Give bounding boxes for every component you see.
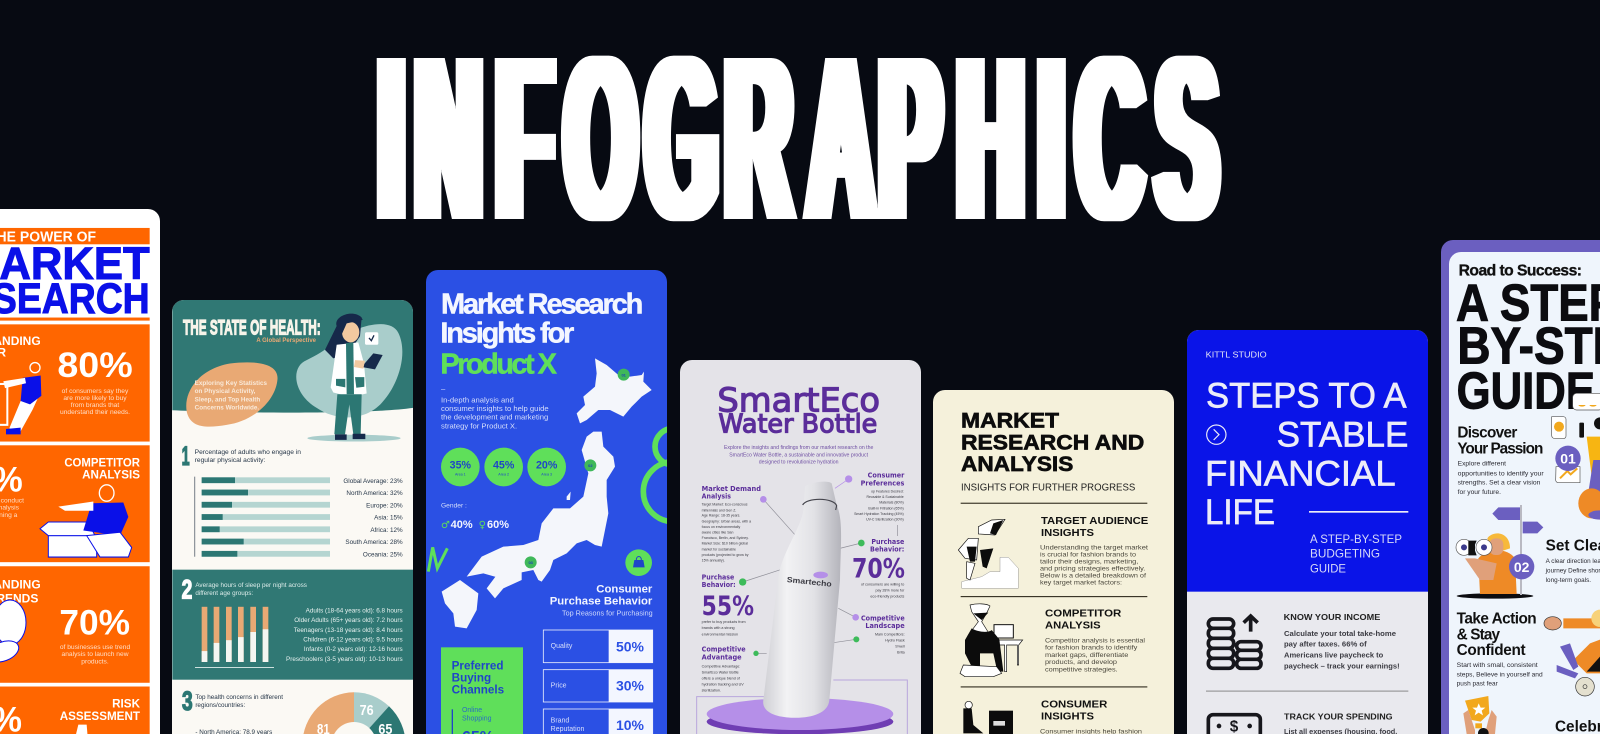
section: competitor analysis: competitive strategies. <box>1045 666 1118 673</box>
text block: market demand analysis <box>702 485 761 562</box>
bar chart: sleep hours <box>195 607 274 668</box>
table: purchase reasons: Quality <box>551 643 573 650</box>
panel: sleep section: Average hours of sleep per night across <box>195 582 307 589</box>
table: purchase reasons: Price <box>551 683 567 690</box>
panel: preferred buying channels <box>441 647 523 734</box>
panel: market research card <box>0 209 160 734</box>
section: target audience insights: Understanding the target market <box>1040 544 1148 551</box>
subtitle <box>1310 533 1402 575</box>
section: set clear goals <box>1545 538 1600 584</box>
panel: state of health card <box>172 292 413 734</box>
text block: purchase behavior 55%: 55% <box>702 591 754 622</box>
panel: sleep section: Older Adults (65+ years old): 7.2 hours <box>294 617 403 624</box>
table: purchase reasons: 50% <box>616 638 645 654</box>
heading: smarteco: SmartEco <box>717 381 880 420</box>
intro text: strategy for Product X. <box>441 421 517 430</box>
panel: sleep section: 2 <box>182 574 192 605</box>
section: discover your passion <box>1457 424 1544 496</box>
text block: competitive advantage: offers a unique blend of <box>702 676 741 680</box>
panel: smarteco water bottle card <box>680 360 921 734</box>
icon: trophy held up <box>1463 696 1497 734</box>
icon: banknote <box>1208 715 1260 734</box>
heading: steps to a stable financial life: FINANCIAL <box>1205 455 1396 494</box>
section: know your income: Americans live paycheck to <box>1284 650 1384 659</box>
panel: understanding behavior: from brands that <box>71 402 119 409</box>
gender stats: 60% <box>487 519 509 531</box>
pie chart: health concerns: 76 <box>360 702 374 718</box>
text block: consumer preferences: Consumer <box>868 472 905 480</box>
heading: road to success: Road to Success: <box>1459 262 1582 279</box>
subtitle: A STEP-BY-STEP <box>1310 533 1402 546</box>
map pins: 03 <box>528 560 534 565</box>
panel: sleep section <box>172 570 413 680</box>
intro text <box>441 390 548 430</box>
heading: consumer purchase behavior: Purchase Behavior <box>550 595 653 607</box>
section: consumer insights: INSIGHTS <box>1041 712 1094 723</box>
gender stats: Gender : <box>441 502 467 509</box>
icon: arrow circle <box>1207 425 1226 444</box>
stat circles: 45% <box>493 459 515 471</box>
bar chart: physical activity: North America: 32% <box>346 490 403 497</box>
dots <box>739 475 865 656</box>
icon: 01 badge: 01 <box>1560 451 1576 467</box>
subheading: INSIGHTS FOR FURTHER PROGRESS <box>961 483 1135 494</box>
section: competitor analysis: products, and develop <box>1045 659 1117 666</box>
panel: market research and analysis card <box>933 390 1174 734</box>
text block: purchase behavior 70% <box>852 538 905 598</box>
panel: understanding behavior: of consumers say they <box>62 388 129 395</box>
section: track your spending: TRACK YOUR SPENDING <box>1284 712 1393 722</box>
section: target audience insights: tailor their designs, marketing, <box>1040 558 1139 565</box>
illustration: signpost with binoculars <box>1456 505 1543 599</box>
section 1 heading: regular physical activity: <box>195 457 265 464</box>
icon: coins <box>0 600 26 666</box>
heading: market research insights: Insights for <box>440 318 574 350</box>
section: target audience insights: is crucial for fashion brands to <box>1040 551 1136 558</box>
text block: purchase behavior 70%: of consumers are willing to <box>861 582 904 586</box>
icon: person at vending machine <box>963 701 1013 734</box>
section 3 heading <box>182 686 283 734</box>
intro text: In-depth analysis and <box>441 396 514 405</box>
text block: competitive advantage: Competitive <box>702 646 746 654</box>
panel: steps to a stable financial life card <box>1187 330 1428 734</box>
section: target audience insights: key target market factors: <box>1040 580 1122 587</box>
section: competitor analysis: Competitor analysis is essential <box>1045 638 1145 645</box>
callout: orange blob with text <box>186 362 278 427</box>
text block: competitive advantage: hydration tracking and UV <box>702 682 744 686</box>
panel: understanding trends: of businesses use trend <box>60 644 130 651</box>
icon: 02 badge: 02 <box>1514 559 1530 575</box>
section: competitor analysis: for fashion brands to identify <box>1045 645 1138 652</box>
connectors <box>743 479 898 653</box>
panel: sleep section: Adults (18-64 years old): 6.8 hours <box>306 608 403 615</box>
section: know your income: pay after taxes. 66% of <box>1284 640 1367 649</box>
panel: preferred buying channels: Preferred <box>452 660 504 673</box>
bar chart: physical activity: South America: 28% <box>345 539 403 546</box>
section: know your income <box>1284 612 1400 670</box>
illustration: person on wheels <box>1544 610 1600 696</box>
stat circles <box>441 448 566 486</box>
section: discover your passion: strengths. Set a clear vision <box>1458 480 1541 487</box>
panel: competitor analysis: ANALYSIS <box>82 469 140 482</box>
text block: purchase behavior 55%: brands with a strong <box>702 626 735 630</box>
stat circles: 35% <box>450 459 472 471</box>
stat circles: 20% <box>536 459 558 471</box>
section: set clear goals: long-term goals. <box>1546 577 1591 584</box>
heading: market research and analysis: MARKET <box>961 409 1059 433</box>
text block: consumer preferences: Smart Hydration Tracking (45%) <box>854 512 904 516</box>
section: competitor analysis: market gaps, differentiate <box>1045 652 1129 659</box>
heading: steps to a stable financial life: LIFE <box>1205 493 1275 532</box>
panel: preferred buying channels: Buying <box>452 672 491 685</box>
map pins: 02 <box>588 463 593 468</box>
bar chart: physical activity: Asia: 15% <box>374 515 403 522</box>
heading: market research <box>0 246 150 314</box>
section: consumer insights: CONSUMER <box>1041 700 1108 711</box>
text block: purchase behavior 70%: 70% <box>852 553 905 584</box>
panel: preferred buying channels: Online <box>462 707 482 714</box>
text block: consumer preferences: Reusable & Sustainable <box>866 495 904 499</box>
text block: competitive landscape: Landscape <box>865 622 905 630</box>
panel: understanding trends: analysis to launch new <box>61 651 129 658</box>
intro text: designed to revolutionize hydration <box>759 460 839 466</box>
text block: market demand analysis: Geography: Urban areas, with a <box>702 519 751 523</box>
text block: competitive advantage: Competitive Advantage: <box>702 664 740 668</box>
section: target audience insights: TARGET AUDIENCE <box>1041 516 1148 527</box>
intro text <box>724 445 873 466</box>
heading: market research insights <box>440 288 643 350</box>
callout: orange blob with text: Concerns Worldwide. <box>195 404 259 412</box>
panel: preferred buying channels: Channels <box>452 683 504 696</box>
section: take action and stay confident: steps, Believe in yourself and <box>1457 671 1543 678</box>
section: discover your passion: for your future. <box>1458 489 1501 496</box>
bar chart: physical activity: Africa: 12% <box>370 527 403 534</box>
callout: orange blob with text: on Physical Activity, <box>195 388 256 395</box>
section: target audience insights: INSIGHTS <box>1041 528 1094 539</box>
heading: steps to a stable financial life <box>1205 376 1408 532</box>
shape: light teal blob <box>296 324 402 417</box>
subtitle: GUIDE <box>1310 562 1346 575</box>
text block: market demand analysis: focus on environmentally <box>702 525 740 529</box>
text block: purchase behavior 55% <box>702 573 754 636</box>
section: target audience insights <box>1040 516 1148 587</box>
panel: product x card <box>426 270 667 734</box>
text block: competitive landscape: Competitive <box>861 614 905 622</box>
panel: understanding behavior: are more likely to buy <box>63 395 127 402</box>
callout: orange blob with text: Sleep, and Top Health <box>195 396 260 403</box>
illustration: bottle: Smartecho <box>786 575 833 589</box>
text block: purchase behavior 55%: Purchase <box>702 573 735 581</box>
stat circles: Area 2 <box>498 472 509 476</box>
panel: sleep section: Children (6-12 years old): 9.5 hours <box>303 636 403 644</box>
bar chart: physical activity: Oceania: 25% <box>363 551 403 558</box>
text block: consumer preferences: Built-in Filtration (65%) <box>868 506 904 510</box>
subheading: Top Reasons for Purchasing <box>562 611 653 618</box>
bar chart: physical activity: Europe: 20% <box>366 502 403 509</box>
panel: road to success card <box>1441 240 1600 734</box>
text block: competitive advantage: sterilization. <box>702 688 721 692</box>
icon: man pushing box <box>0 363 41 434</box>
text block: purchase behavior 70%: Behavior: <box>870 546 904 554</box>
heading: market research and analysis: RESEARCH AND <box>961 430 1144 454</box>
panel: understanding behavior: 80% <box>57 347 133 385</box>
illustration: bottle <box>763 482 841 718</box>
illustration: person with phone <box>1552 393 1600 520</box>
panel: understanding trends: products. <box>81 658 109 665</box>
text block: market demand analysis: Age Range: 18-35 years. <box>702 514 740 518</box>
text block: market demand analysis: 15% annually). <box>702 558 725 562</box>
icon: 02 badge <box>1509 554 1534 579</box>
text block: consumer preferences: UV-C Sterilization (30%) <box>866 518 904 522</box>
title: INFOGRAPHICS <box>379 7 1217 269</box>
section 3 heading: regions/countries: <box>195 702 245 709</box>
text block: market demand analysis: products (projected to grow by <box>702 553 749 557</box>
heading: market research insights: Market Research <box>441 288 643 320</box>
text block: purchase behavior 70%: eco-friendly products <box>870 594 904 598</box>
intro text: – <box>441 384 446 393</box>
heading: water bottle: Water Bottle <box>718 409 877 439</box>
section: take action and stay confident: Confident <box>1457 642 1526 659</box>
text block: purchase behavior 55%: prefer to buy products from <box>702 620 746 624</box>
panel: risk assessment: RISK <box>112 698 140 711</box>
stat circles: Area 3 <box>541 472 552 476</box>
section: take action and stay confident: Take Action <box>1457 610 1537 627</box>
text block: consumer preferences: Materials (80%) <box>879 501 904 505</box>
table: purchase reasons <box>543 630 653 734</box>
section 1 heading: 1 <box>182 441 190 471</box>
text block: market demand analysis: Analysis <box>702 493 731 501</box>
text block: purchase behavior 55%: Behavior: <box>702 581 736 589</box>
panel: competitor analysis: conduct <box>1 497 24 505</box>
gender stats: ♂ <box>441 520 450 531</box>
heading: a step-by-step guide <box>1456 274 1600 419</box>
table: purchase reasons: Reputation <box>551 726 585 733</box>
section: know your income: KNOW YOUR INCOME <box>1284 612 1381 622</box>
text block: competitive advantage: SmartEco Water Bottle <box>702 670 739 674</box>
label: kittl studio: KITTL STUDIO <box>1206 350 1267 360</box>
intro text: the development and marketing <box>441 413 548 422</box>
section 1 heading <box>182 446 301 466</box>
text block: purchase behavior 70%: pay 28% more for <box>875 588 905 592</box>
section: target audience insights: and pricing strategies effectively. <box>1040 565 1146 572</box>
section: consumer insights <box>1040 700 1142 734</box>
intro text: SmartEco Water Bottle, a sustainable and innovative product <box>729 452 869 458</box>
section: competitor analysis <box>1045 608 1145 673</box>
section: take action and stay confident: push past fear <box>1457 681 1499 688</box>
section 3 heading: Top health concerns in different <box>195 694 283 701</box>
panel: understanding behavior <box>0 324 150 442</box>
section: track your spending <box>1284 712 1397 734</box>
gender stats <box>441 502 509 531</box>
text block: market demand analysis: millennials and Gen Z. <box>702 508 736 512</box>
section 3 heading: 3 <box>182 686 193 716</box>
text block: market demand analysis: Target Market: Eco-conscious <box>702 503 748 507</box>
section: target audience insights: Below is a detailed breakdown of <box>1040 572 1146 579</box>
chart: map of Japan <box>442 358 652 628</box>
heading: consumer purchase behavior: Consumer <box>596 583 653 595</box>
frame and platform <box>697 680 907 734</box>
icon: people climbing stairs <box>958 519 1018 588</box>
section: discover your passion: Discover <box>1457 424 1517 441</box>
panel: sleep section: Teenagers (13-18 years old): 8.4 hours <box>294 627 403 634</box>
text block: market demand analysis: Francisco, Berlin, and Sydney. <box>702 536 749 540</box>
bar chart: physical activity: Global Average: 23% <box>343 478 403 485</box>
heading: the state of health: THE STATE OF HEALTH: <box>183 316 321 340</box>
icon: man with treasure box <box>40 485 132 557</box>
panel: understanding trends <box>0 566 150 683</box>
panel: risk assessment <box>0 687 150 734</box>
section: competitor analysis: COMPETITOR <box>1045 608 1122 619</box>
pie chart: health concerns <box>302 692 406 734</box>
map pins <box>525 369 630 568</box>
text block: purchase behavior 70%: Purchase <box>871 538 905 546</box>
text block: competitive landscape <box>861 614 906 655</box>
text block: competitive landscape: S'well <box>895 645 905 649</box>
panel: sleep section: Infants (0-2 years old): 12-16 hours <box>304 646 403 653</box>
panel: sleep section: different age groups: <box>195 590 253 597</box>
gender stats: 40% <box>451 519 473 531</box>
text block: competitive landscape: Brita <box>897 651 906 655</box>
icon: shopping bag <box>625 549 652 576</box>
panel: preferred buying channels: Shopping <box>462 716 492 723</box>
heading: steps to a stable financial life: STABLE <box>1277 416 1408 455</box>
text block: competitive advantage: Advantage <box>702 653 742 661</box>
text block: consumer preferences: Preferences <box>861 479 904 487</box>
table: purchase reasons: Brand <box>551 718 569 725</box>
icon: 01 badge <box>1555 446 1581 471</box>
heading: consumer purchase behavior <box>550 585 652 604</box>
subheading: A Global Perspective <box>256 338 317 344</box>
panel: competitor analysis: COMPETITOR <box>64 456 140 469</box>
section: take action and stay confident <box>1457 610 1543 688</box>
section: discover your passion: Explore different <box>1458 461 1506 468</box>
bar chart: physical activity <box>194 477 403 558</box>
map pins: 01 <box>621 372 627 377</box>
icon: coin stacks with arrow <box>1208 616 1261 668</box>
stat circles: Area 1 <box>455 472 466 476</box>
callout: orange blob with text: Exploring Key Statistics <box>195 380 267 387</box>
heading: market research and analysis: ANALYSIS <box>961 452 1073 476</box>
text block: market demand analysis: Market Size: $10 billion global <box>702 542 748 546</box>
text block: competitive advantage <box>702 646 746 692</box>
text block: market demand analysis: aware cities like San <box>702 531 733 535</box>
section 1 heading: Percentage of adults who engage in <box>195 449 301 456</box>
panel: understanding behavior: understand their needs. <box>60 409 130 416</box>
decoration: green rings <box>426 426 667 573</box>
panel: risk assessment: ASSESSMENT <box>60 710 141 723</box>
section: competitor analysis: ANALYSIS <box>1045 620 1101 631</box>
section: know your income: paycheck – track your earnings! <box>1284 661 1400 670</box>
icon: doctor <box>307 314 401 442</box>
heading: product x: Product X <box>440 348 558 380</box>
text block: competitive landscape: Hydro Flask <box>885 639 905 643</box>
gender stats: ♀ <box>479 520 486 531</box>
text block: consumer preferences: op Features Desired: <box>871 489 904 493</box>
intro text: consumer insights to help guide <box>441 404 549 413</box>
text block: competitive landscape: Main Competitors: <box>875 633 905 637</box>
text block: market demand analysis: market for sustainable <box>702 547 736 551</box>
panel: sleep section: Preschoolers (3-5 years old): 10-13 hours <box>286 656 403 663</box>
table: purchase reasons: 10% <box>616 717 645 733</box>
section: take action and stay confident: Start with small, consistent <box>1457 662 1538 669</box>
section: take action and stay confident: & Stay <box>1457 626 1500 643</box>
intro text: Explore the insights and findings from our market research on the <box>724 445 873 451</box>
section: discover your passion: Your Passion <box>1457 440 1543 457</box>
text block: market demand analysis: Market Demand <box>702 485 761 493</box>
panel: understanding trends: 70% <box>59 604 130 642</box>
heading: market research and analysis <box>961 409 1144 476</box>
icon: person at desk <box>960 604 1023 677</box>
heading: steps to a stable financial life: STEPS TO A <box>1206 376 1407 415</box>
table: purchase reasons: 30% <box>616 678 645 694</box>
text block: consumer preferences <box>854 472 905 522</box>
text block: purchase behavior 55%: environmental mission <box>702 632 738 636</box>
section: discover your passion: opportunities to identify your <box>1458 470 1544 477</box>
section: know your income: Calculate your total take-home <box>1284 629 1396 638</box>
panel: competitor analysis <box>0 445 150 562</box>
subtitle: BUDGETING <box>1310 548 1380 561</box>
